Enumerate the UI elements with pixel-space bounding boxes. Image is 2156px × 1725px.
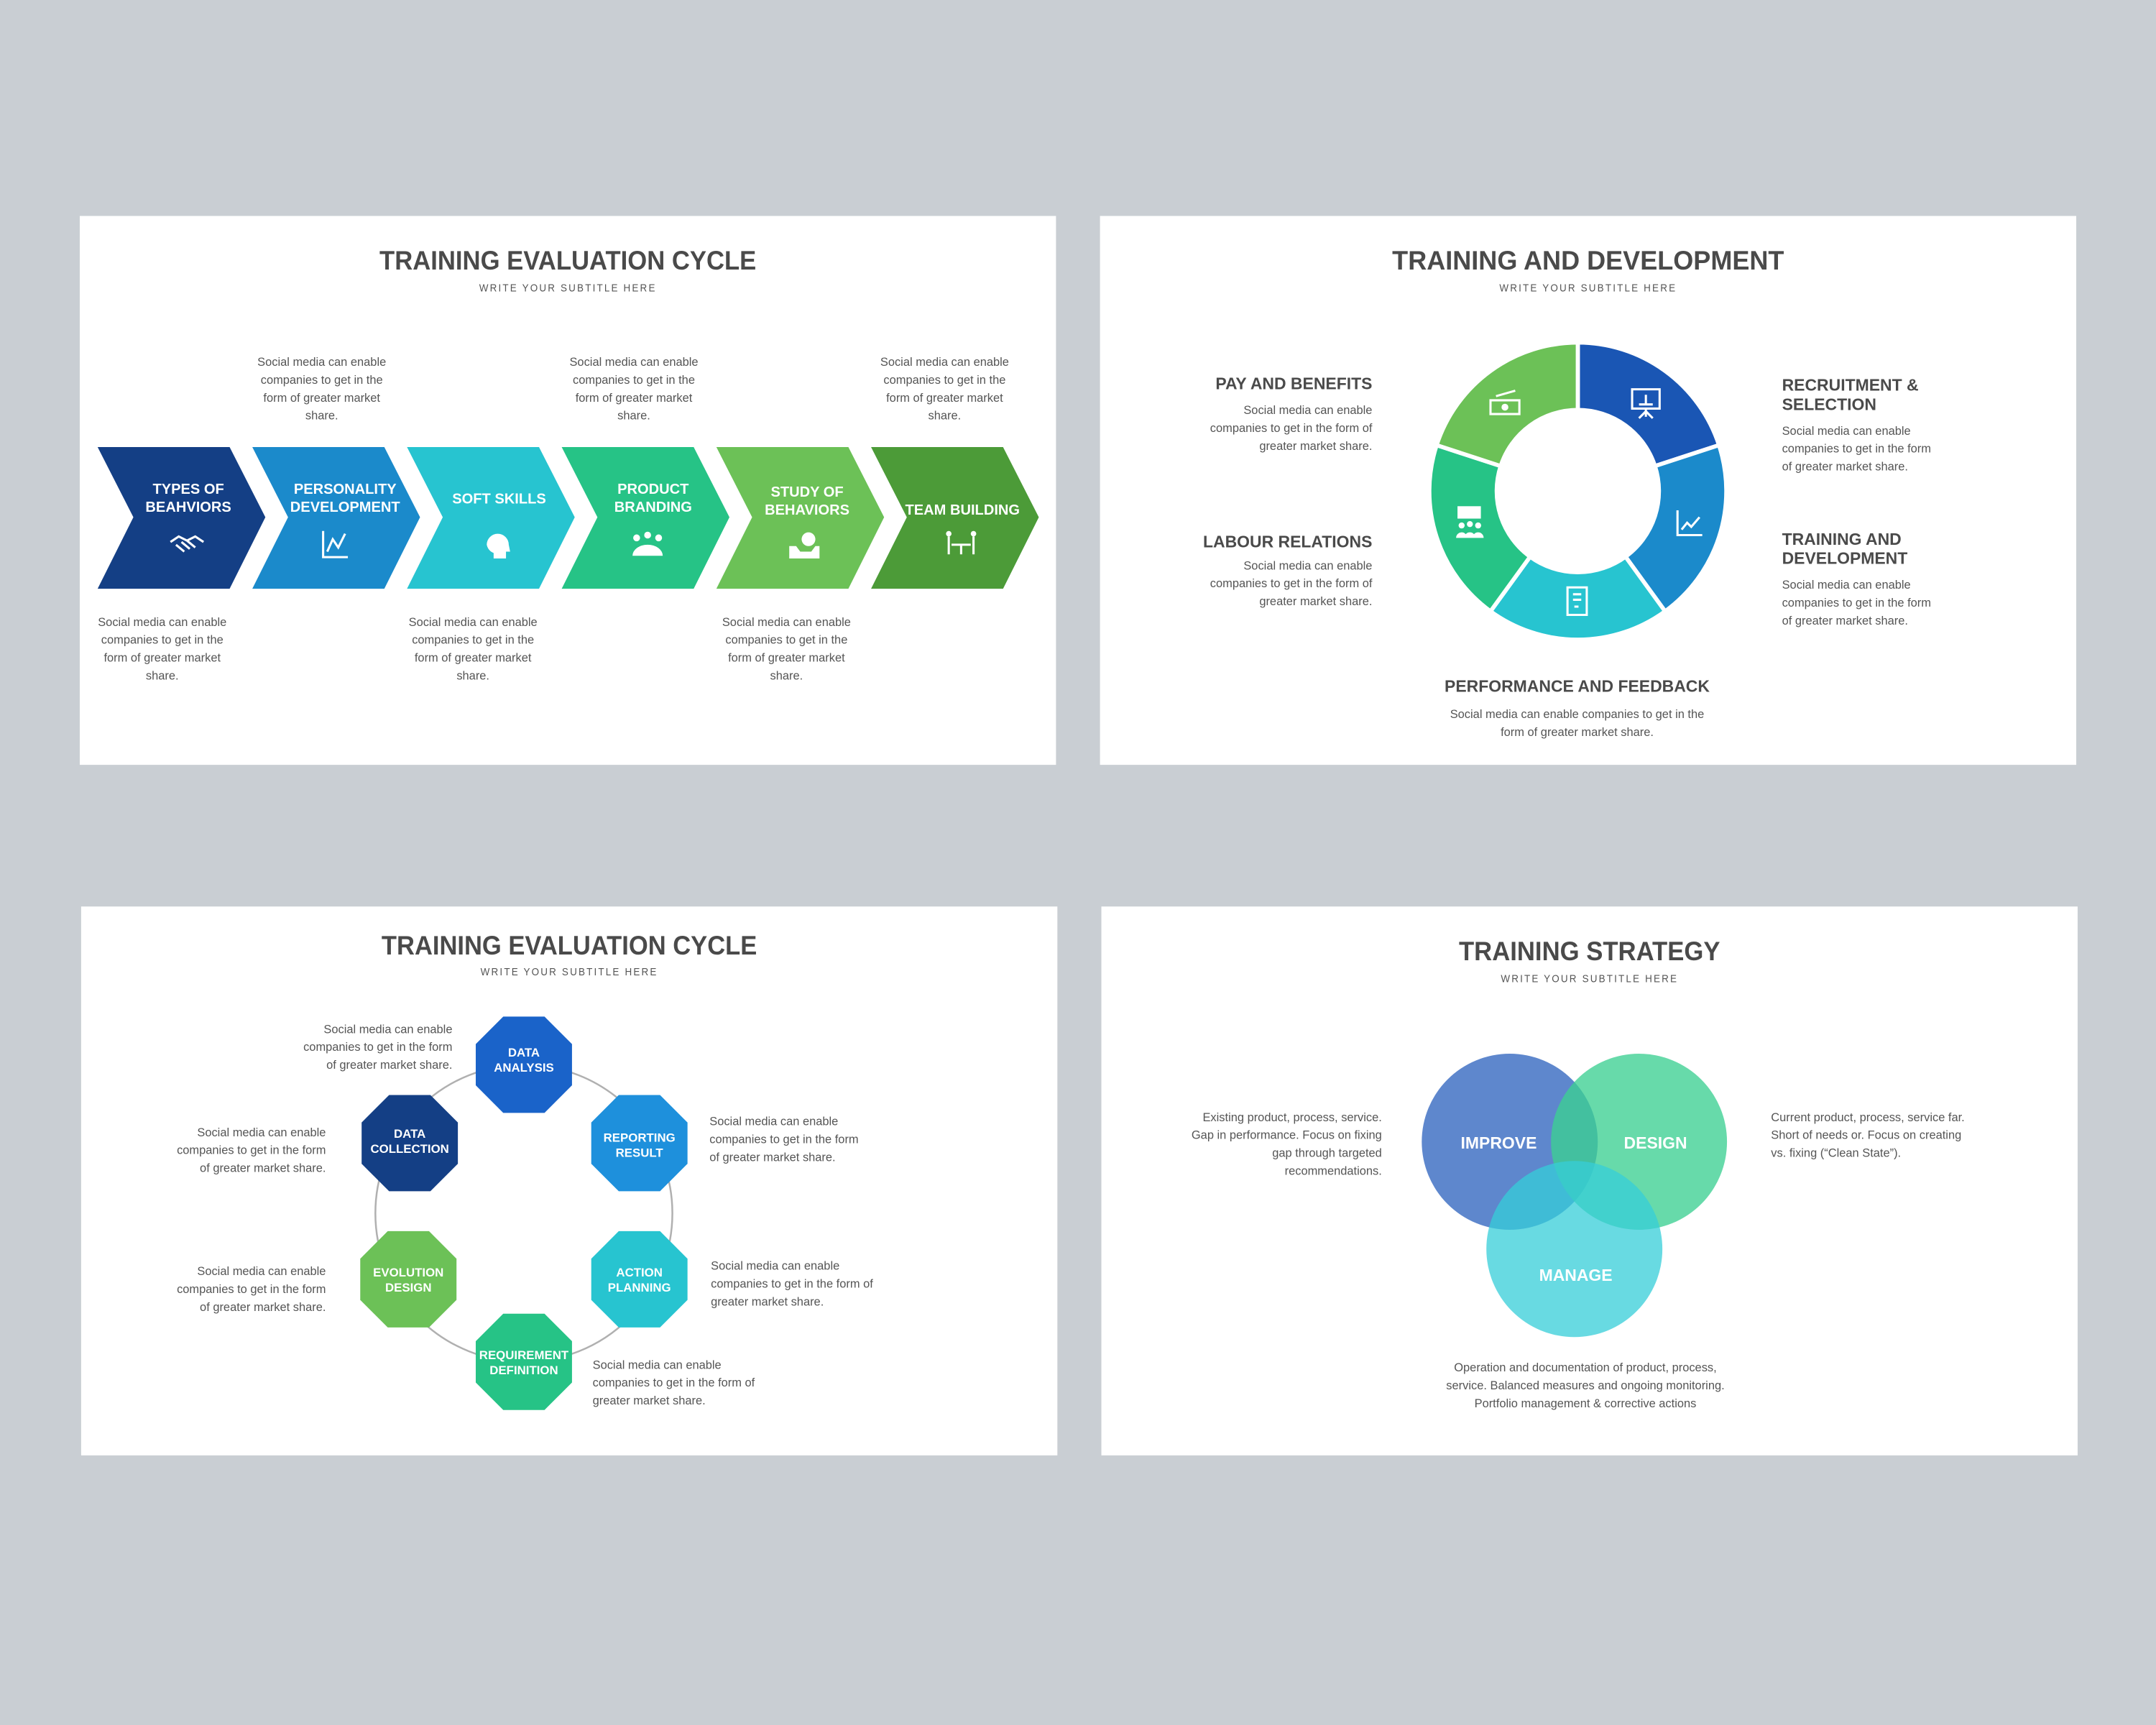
text blocks: of greater market share. <box>326 1059 452 1072</box>
text blocks below: Social media can enable <box>98 616 226 629</box>
octagon: evolution design: DESIGN <box>385 1281 432 1294</box>
chevron: soft skills: SOFT SKILLS <box>452 491 546 507</box>
octagon: action planning <box>591 1231 688 1328</box>
title: TRAINING AND DEVELOPMENT <box>1392 245 1784 275</box>
text blocks: companies to get in the form <box>303 1041 452 1054</box>
label: training and development: DEVELOPMENT <box>1782 549 1907 568</box>
label: performance and feedback: Social media can enable companies to get in the <box>1450 708 1704 721</box>
title: TRAINING EVALUATION CYCLE <box>379 245 756 275</box>
panel: training strategy venn <box>1102 906 2078 1455</box>
label: performance and feedback <box>1445 677 1710 739</box>
label: pay and benefits: companies to get in the form of <box>1210 422 1373 435</box>
text blocks below: share. <box>456 669 489 682</box>
subtitle: WRITE YOUR SUBTITLE HERE <box>1501 974 1678 985</box>
label: labour relations: LABOUR RELATIONS <box>1203 533 1372 551</box>
text: manage: service. Balanced measures and ongoing monitoring. <box>1446 1379 1725 1392</box>
title: TRAINING EVALUATION CYCLE <box>382 930 757 960</box>
chevron: team building: TEAM BUILDING <box>906 502 1020 518</box>
text blocks above: Social media can enable <box>880 356 1009 369</box>
icon: labour group <box>1456 506 1483 538</box>
text: improve: Gap in performance. Focus on fixing <box>1192 1129 1382 1142</box>
label: training and development: Social media can enable <box>1782 579 1911 592</box>
chevron: types of behaviors: BEAHVIORS <box>145 500 231 515</box>
text blocks: of greater market share. <box>709 1151 836 1164</box>
text blocks below: Social media can enable <box>409 616 538 629</box>
text blocks below: companies to get in the <box>412 634 534 647</box>
chevron: study of behaviors <box>717 447 884 589</box>
text blocks above: form of greater market <box>576 392 693 405</box>
label: pay and benefits <box>1210 374 1373 453</box>
text: manage: Portfolio management & corrective actions <box>1475 1397 1696 1410</box>
title: TRAINING STRATEGY <box>1459 936 1720 966</box>
text blocks above: form of greater market <box>263 392 380 405</box>
label: recruitment & selection: RECRUITMENT & <box>1782 376 1919 395</box>
text blocks: Social media can enable <box>323 1023 452 1036</box>
text: improve: Existing product, process, service. <box>1202 1111 1382 1124</box>
text: manage <box>1446 1361 1725 1410</box>
octagon: evolution design <box>360 1231 456 1328</box>
text blocks: companies to get in the form of <box>593 1376 755 1389</box>
icon: clipboard <box>1567 587 1587 615</box>
text blocks below: companies to get in the <box>725 634 847 647</box>
text blocks above: form of greater market <box>886 392 1003 405</box>
text blocks above: companies to get in the <box>573 374 695 387</box>
octagon: requirement definition: DEFINITION <box>489 1363 558 1377</box>
label: labour relations <box>1203 533 1373 608</box>
label: labour relations: companies to get in the form of <box>1210 577 1373 590</box>
text blocks below: share. <box>770 669 803 682</box>
subtitle: WRITE YOUR SUBTITLE HERE <box>1499 283 1677 295</box>
text blocks above: share. <box>617 410 650 423</box>
label: training and development <box>1782 530 1931 627</box>
label: training and development: companies to get in the form <box>1782 597 1931 610</box>
text blocks above: share. <box>929 410 961 423</box>
text: improve <box>1192 1111 1382 1177</box>
octagon: action planning: PLANNING <box>608 1281 671 1294</box>
text blocks below: form of greater market <box>103 652 221 665</box>
octagon: action planning: ACTION <box>616 1266 663 1279</box>
label: recruitment & selection <box>1782 376 1931 474</box>
chevron: personality development: PERSONALITY <box>294 482 397 497</box>
text blocks above: Social media can enable <box>257 356 386 369</box>
chevron: product branding: PRODUCT <box>617 482 689 497</box>
chevron: product branding: BRANDING <box>614 500 692 515</box>
octagon: data analysis <box>476 1016 572 1113</box>
text blocks above: share. <box>305 410 338 423</box>
text blocks above <box>257 356 1009 423</box>
text blocks: Social media can enable <box>593 1358 722 1371</box>
text blocks below: form of greater market <box>415 652 532 665</box>
label: labour relations: Social media can enable <box>1243 559 1372 572</box>
venn diagram: DESIGN <box>1624 1133 1687 1152</box>
subtitle: WRITE YOUR SUBTITLE HERE <box>479 283 657 295</box>
text blocks: companies to get in the form of <box>711 1277 873 1290</box>
icon: money <box>1491 391 1519 414</box>
text blocks above: companies to get in the <box>261 374 383 387</box>
text blocks <box>177 1023 873 1407</box>
label: recruitment & selection: Social media can enable <box>1782 425 1911 438</box>
text blocks: companies to get in the form <box>709 1133 859 1146</box>
text blocks above: Social media can enable <box>569 356 699 369</box>
chevron: team building <box>871 447 1038 589</box>
chevron: personality development <box>252 447 420 589</box>
octagon: reporting result: REPORTING <box>604 1131 676 1145</box>
label: pay and benefits: Social media can enable <box>1243 404 1372 417</box>
text blocks below <box>98 616 851 682</box>
text: design: Current product, process, service far. <box>1771 1111 1965 1124</box>
panel: training evaluation cycle chevrons <box>80 216 1056 765</box>
donut chart <box>1429 343 1726 640</box>
panel: training evaluation cycle octagons <box>81 906 1057 1455</box>
text blocks: greater market share. <box>711 1295 824 1308</box>
text blocks below: companies to get in the <box>101 634 224 647</box>
chevron: types of behaviors: TYPES OF <box>152 482 224 497</box>
text: design: Short of needs or. Focus on creating <box>1771 1129 1961 1142</box>
text blocks: companies to get in the form <box>177 1283 326 1296</box>
text blocks below: Social media can enable <box>722 616 851 629</box>
label: recruitment & selection: companies to get in the form <box>1782 443 1931 456</box>
text: manage: Operation and documentation of product, process, <box>1454 1361 1717 1374</box>
octagon: requirement definition <box>476 1314 572 1410</box>
octagon: data collection: DATA <box>394 1127 425 1141</box>
text blocks: Social media can enable <box>711 1260 839 1273</box>
chevron: personality development: DEVELOPMENT <box>290 500 400 515</box>
octagon: evolution design: EVOLUTION <box>373 1266 443 1279</box>
octagon: requirement definition: REQUIREMENT <box>479 1348 569 1362</box>
panel: training and development donut <box>1100 216 2076 765</box>
label: recruitment & selection: SELECTION <box>1782 395 1876 413</box>
icon: presentation board <box>1632 390 1659 418</box>
text: improve: recommendations. <box>1285 1164 1382 1177</box>
text blocks: Social media can enable <box>197 1126 326 1139</box>
label: training and development: TRAINING AND <box>1782 530 1902 548</box>
cycle ring <box>375 1064 673 1362</box>
label: performance and feedback: form of greater market share. <box>1501 726 1654 739</box>
text: design: vs. fixing (“Clean State”). <box>1771 1147 1901 1160</box>
chevron: types of behaviors <box>98 447 265 589</box>
chevron: product branding <box>562 447 729 589</box>
text blocks below: share. <box>146 669 179 682</box>
text blocks: companies to get in the form <box>177 1144 326 1157</box>
octagon: data analysis: DATA <box>508 1046 540 1059</box>
chevron: study of behaviors: BEHAVIORS <box>765 502 849 518</box>
text blocks: Social media can enable <box>709 1116 838 1128</box>
text: design <box>1771 1111 1965 1160</box>
label: recruitment & selection: of greater market share. <box>1782 461 1908 474</box>
label: pay and benefits: greater market share. <box>1259 440 1372 453</box>
subtitle: WRITE YOUR SUBTITLE HERE <box>481 967 658 978</box>
text blocks: of greater market share. <box>200 1162 326 1175</box>
text blocks below: form of greater market <box>728 652 845 665</box>
label: training and development: of greater market share. <box>1782 615 1908 627</box>
octagon: data analysis: ANALYSIS <box>494 1061 554 1075</box>
label: performance and feedback: PERFORMANCE AND FEEDBACK <box>1445 677 1710 696</box>
octagon: data collection: COLLECTION <box>370 1142 449 1156</box>
venn diagram: IMPROVE <box>1461 1133 1537 1152</box>
text blocks: of greater market share. <box>200 1301 326 1314</box>
octagon: reporting result: RESULT <box>616 1146 663 1160</box>
venn diagram <box>1422 1054 1727 1337</box>
icon: growth chart <box>1677 510 1703 535</box>
label: pay and benefits: PAY AND BENEFITS <box>1215 374 1372 393</box>
label: labour relations: greater market share. <box>1259 595 1372 608</box>
octagon: data collection <box>361 1095 458 1191</box>
text blocks: Social media can enable <box>197 1265 326 1278</box>
chevron: study of behaviors: STUDY OF <box>771 484 844 500</box>
venn diagram: MANAGE <box>1539 1266 1613 1284</box>
octagon: reporting result <box>591 1095 688 1191</box>
text blocks: greater market share. <box>593 1394 706 1407</box>
text blocks above: companies to get in the <box>883 374 1005 387</box>
chevron: soft skills <box>407 447 575 589</box>
text: improve: gap through targeted <box>1272 1147 1382 1160</box>
